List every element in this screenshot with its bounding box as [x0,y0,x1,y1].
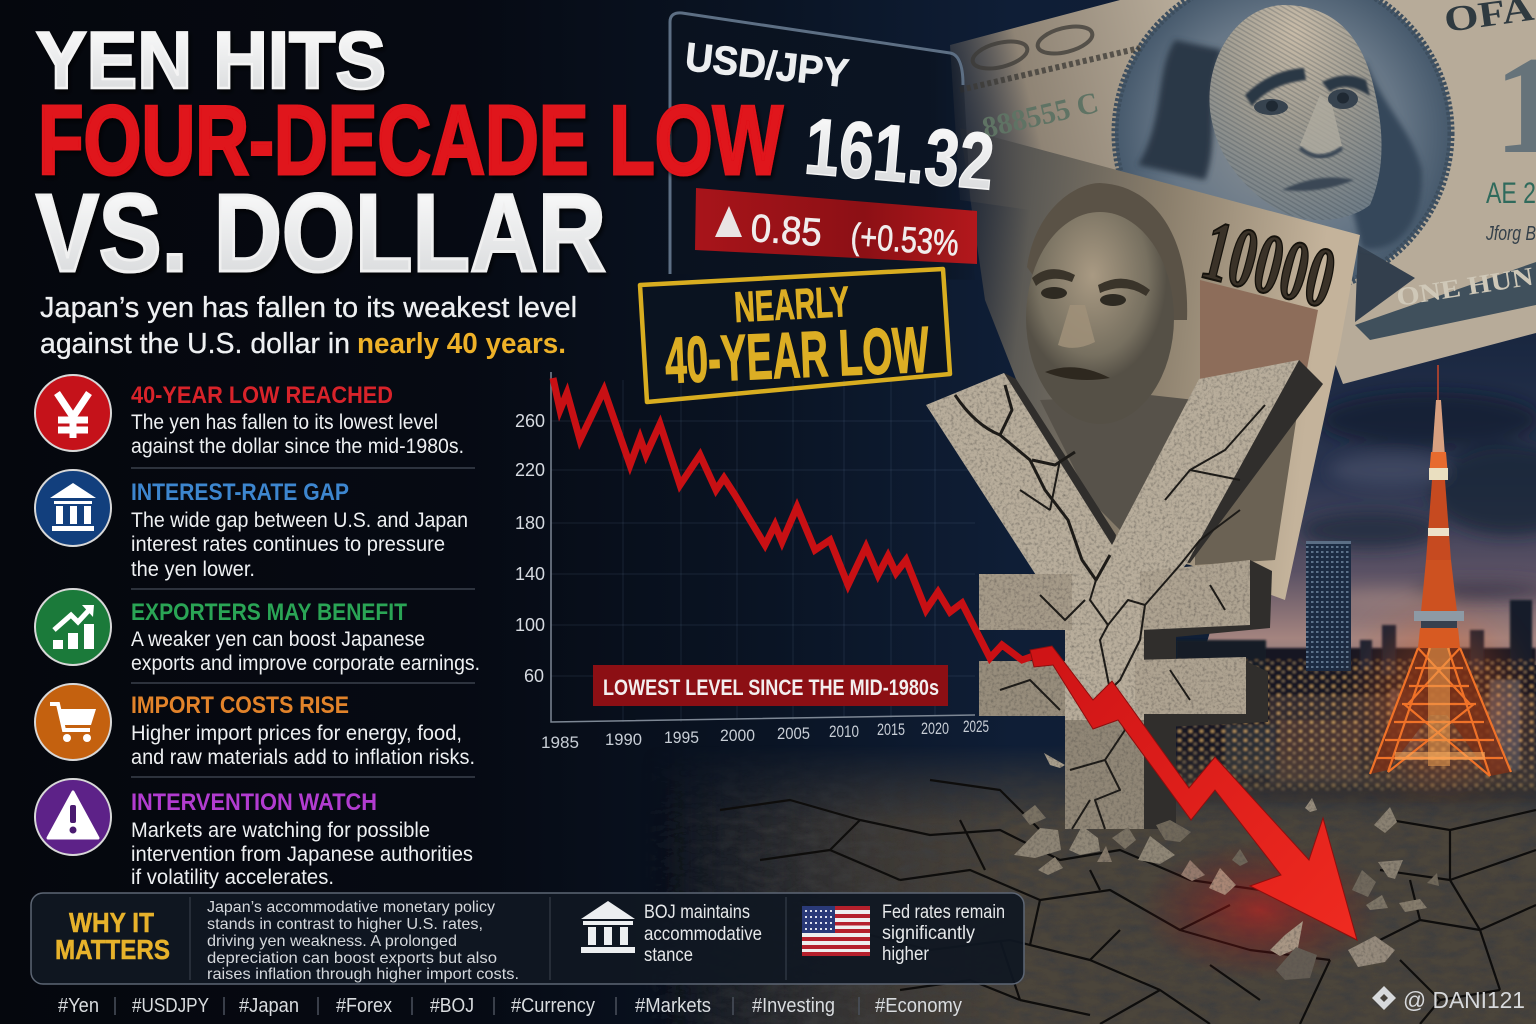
yen note ornament [1200,280,1318,440]
BOJ text: accommodative [644,924,762,945]
change badge [695,188,977,264]
price: 161.32 [802,101,998,206]
stamp line 2: 40-YEAR LOW [663,313,931,397]
dollar text ONE HUN: ONE HUN [1394,262,1535,312]
chart axes [551,372,975,722]
hashtags: #Forex [336,995,392,1017]
up triangle [715,206,742,237]
red glow at impact [1140,840,1380,980]
Fed text [882,902,1005,965]
hashtags [58,995,962,1017]
y axis labels: 100 [515,615,545,635]
subtitle: against the U.S. dollar in [40,328,350,360]
point: intervention: intervention from Japanese authorities [131,842,473,866]
watermark: @ DANI121 [1403,987,1525,1013]
x axis labels: 1995 [664,728,699,747]
y axis labels [515,411,545,686]
point: intervention [35,779,473,889]
Shibusawa nose and mouth [1045,305,1110,380]
icon: warning [35,779,111,855]
symbol cracks [955,385,1265,829]
hashtags: #Yen [58,995,99,1017]
why it matters panel [31,893,1024,984]
y axis labels: 60 [524,666,544,686]
point: 40-year low: 40-YEAR LOW REACHED [131,382,393,409]
panel heading: WHY IT [69,907,154,938]
point: interest-rate gap: INTEREST-RATE GAP [131,479,349,506]
photo: sky over Tokyo [1200,330,1536,665]
dollar serial number: 888555 C [979,86,1102,145]
icon: shopping cart [35,684,111,760]
point: interest-rate gap: the yen lower. [131,557,255,581]
big red arrow [1030,646,1357,940]
Fed text: Fed rates remain [882,902,1005,923]
y axis labels: 220 [515,460,545,480]
point: exporters [35,589,480,675]
point: 40-year low: The yen has fallen to its lowest level [131,410,438,434]
hashtags: #USDJPY [132,995,209,1017]
rubble near arrow tip [1348,936,1395,967]
point: 40-year low [35,375,464,458]
point: intervention: Markets are watching for possible [131,818,430,842]
Franklin nose and mouth [1282,95,1354,191]
icon: bank [35,470,111,546]
giant stone yen symbol [926,360,1323,829]
Franklin hair right [1345,60,1422,249]
y axis labels: 260 [515,411,545,431]
hashtags: #BOJ [430,995,474,1017]
photo: clouds [1300,392,1536,610]
Franklin hair left [1138,40,1222,180]
panel paragraph: raises inflation through higher import costs. [207,966,519,983]
hashtags: #Markets [635,995,711,1017]
chart label: lowest level: LOWEST LEVEL SINCE THE MID-1980s [603,675,939,700]
point: intervention: if volatility accelerates. [131,865,334,889]
x axis labels [541,717,989,752]
key points list [35,375,480,889]
x axis labels: 2000 [720,726,755,745]
photo: dollar banknote [950,0,1536,384]
ground cracks [720,780,1536,1024]
point: 40-year low: against the dollar since the mid-1980s. [131,434,464,458]
point: exporters: exports and improve corporate earnings. [131,651,480,675]
dollar lower band [1355,262,1536,340]
x axis labels: 1990 [605,730,642,749]
x axis labels: 2010 [829,722,859,741]
point: exporters: A weaker yen can boost Japanese [131,627,425,651]
title line 1: YEN HITS [36,16,386,106]
x axis labels: 1985 [541,733,579,752]
y axis labels: 140 [515,564,545,584]
point: intervention: INTERVENTION WATCH [131,789,377,816]
Shibusawa neck and collar [1040,395,1195,540]
hashtags: #Economy [875,995,962,1017]
stamp line 1: NEARLY [733,278,850,332]
panel paragraph: Japan’s accommodative monetary policy [207,899,495,916]
Franklin coat [1355,245,1415,322]
point: import costs: IMPORT COSTS RISE [131,692,349,719]
x axis labels: 2015 [877,720,905,739]
panel paragraph: driving yen weakness. A prolonged [207,933,457,950]
point: interest-rate gap: The wide gap between U.S. and Japan [131,508,468,532]
Fed text: higher [882,944,930,965]
subtitle [40,292,577,360]
Franklin face [1209,5,1382,220]
BOJ text: BOJ maintains [644,902,750,923]
falling chart line [553,378,1357,940]
point: import costs [35,684,475,769]
x axis labels: 2005 [777,724,810,743]
hashtags: #Investing [752,995,835,1017]
BOJ text [644,902,762,966]
icon: BOJ building [581,901,635,953]
icon: US flag [802,906,870,956]
title [36,16,783,295]
title line 2: FOUR-DECADE LOW [38,85,783,195]
dollar top engraving [960,22,1140,90]
symbol depth faces [1004,360,1323,829]
change percent: (+0.53% [849,215,960,264]
Shibusawa hair [1027,183,1187,320]
Shibusawa brows and eyes [1032,269,1150,306]
pair label: USD/JPY [683,35,851,96]
x axis labels: 2020 [921,719,949,738]
portrait oval [1115,0,1451,295]
title line 3: VS. DOLLAR [36,172,606,295]
Franklin eyes and brows [1245,68,1370,115]
hashtags: #Currency [511,995,595,1017]
ticker panel [670,13,998,280]
stamp: nearly 40-year low [640,269,950,402]
x axis labels: 2025 [963,717,989,736]
point: interest-rate gap [35,470,468,581]
Fed text: significantly [882,923,975,944]
photo: Tokyo Tower [1370,365,1511,780]
change value: 0.85 [749,207,823,255]
yen note value: 10000 [1193,201,1345,326]
panel paragraph: stands in contrast to higher U.S. rates, [207,916,483,933]
Shibusawa face [1026,212,1174,424]
photo: yen banknote [960,128,1360,600]
line chart [515,372,989,752]
chart label: lowest level [593,665,948,706]
panel heading: MATTERS [55,934,170,965]
point: interest-rate gap: interest rates continues to pressure [131,532,445,556]
point: exporters: EXPORTERS MAY BENEFIT [131,599,407,626]
symbol front face [926,360,1299,829]
photo: Tokyo skyline [1176,541,1536,803]
y axis labels: 180 [515,513,545,533]
panel paragraph [207,899,519,983]
point: import costs: Higher import prices for energy, food, [131,721,462,745]
hashtags: #Japan [239,995,299,1017]
BOJ text: stance [644,945,693,966]
rubble [1014,753,1439,980]
subtitle: Japan’s yen has fallen to its weakest level [40,292,577,324]
photo: cracked ground [668,756,1536,1024]
panel heading [55,907,170,965]
icon: yen coin [35,375,111,451]
point: import costs: and raw materials add to inflation risks. [131,745,475,769]
icon: rising chart [35,589,111,665]
panel paragraph: depreciation can boost exports but also [207,950,497,967]
subtitle: nearly 40 years. [357,328,566,360]
